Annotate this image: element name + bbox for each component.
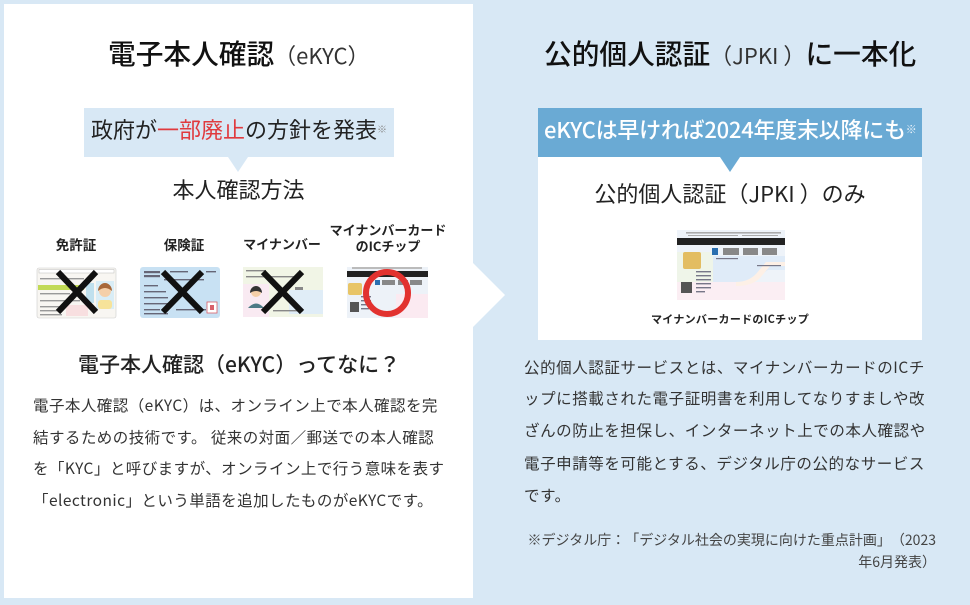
- label: IC chip: マイナンバーカードのICチップ: [651, 311, 809, 327]
- text block: JPKI description: 電子申請等を可能とする、デジタル庁の公的なサービス: [524, 452, 925, 474]
- icon: IC chip card circled: [347, 267, 428, 318]
- text block: JPKI description: ざんの防止を担保し、インターネット上での本人確認や: [524, 419, 926, 441]
- title: eKYC: 電子本人確認（eKYC）: [108, 32, 370, 72]
- text block: JPKI description: です。: [524, 484, 571, 506]
- footnote: source: [527, 530, 936, 572]
- text block: JPKI description: 公的個人認証サービスとは、マイナンバーカードのICチ: [524, 356, 925, 378]
- text block: eKYC description: 結するための技術です。 従来の対面／郵送での本人確認: [33, 426, 434, 448]
- label: my number card IC chip: のICチップ: [356, 236, 420, 255]
- label: insurance card: 保険証: [164, 234, 204, 254]
- icon: driver licence crossed: [36, 268, 116, 318]
- title: JPKI: 公的個人認証（JPKI ）に一本化: [544, 32, 916, 72]
- text block: eKYC description: [33, 394, 444, 511]
- label: driver licence: 免許証: [56, 234, 96, 254]
- label: my number card IC chip: [330, 220, 446, 255]
- text block: JPKI description: ップに搭載された電子証明書を利用してなりすましや改: [524, 387, 925, 409]
- footnote: source: ※デジタル庁：「デジタル社会の実現に向けた重点計画」（2023: [527, 530, 936, 550]
- text block: eKYC description: 「electronic」という単語を追加したものがeKYCです。: [33, 489, 433, 511]
- icon: insurance card crossed: [140, 267, 220, 318]
- arrow: eKYC to JPKI: [473, 263, 505, 327]
- callout: partial abolition: [84, 108, 394, 172]
- panel: eKYC: [4, 4, 473, 598]
- text block: eKYC description: 電子本人確認（eKYC）は、オンライン上で本人確認を完: [33, 394, 438, 416]
- panel: JPKI result: [538, 108, 922, 340]
- heading: verification methods: 本人確認方法: [172, 173, 304, 205]
- label: my number: マイナンバー: [243, 234, 321, 253]
- callout: partial abolition: 政府が一部廃止の方針を発表※: [91, 113, 387, 145]
- heading: JPKI only: 公的個人認証（JPKI ）のみ: [594, 177, 866, 209]
- callout: eKYC end date: [538, 108, 922, 172]
- icon: my number notification crossed: [243, 267, 323, 317]
- heading: what is eKYC: 電子本人確認（eKYC）ってなに？: [78, 349, 400, 379]
- callout: eKYC end date: eKYCは早ければ2024年度末以降にも※: [544, 113, 916, 145]
- text block: JPKI description: [524, 356, 926, 506]
- icon: IC chip card: [677, 230, 785, 300]
- label: my number card IC chip: マイナンバーカード: [330, 220, 446, 239]
- footnote: source: 年6月発表）: [858, 552, 936, 572]
- text block: eKYC description: を「KYC」と呼びますが、オンライン上で行う意味を表す: [33, 457, 444, 479]
